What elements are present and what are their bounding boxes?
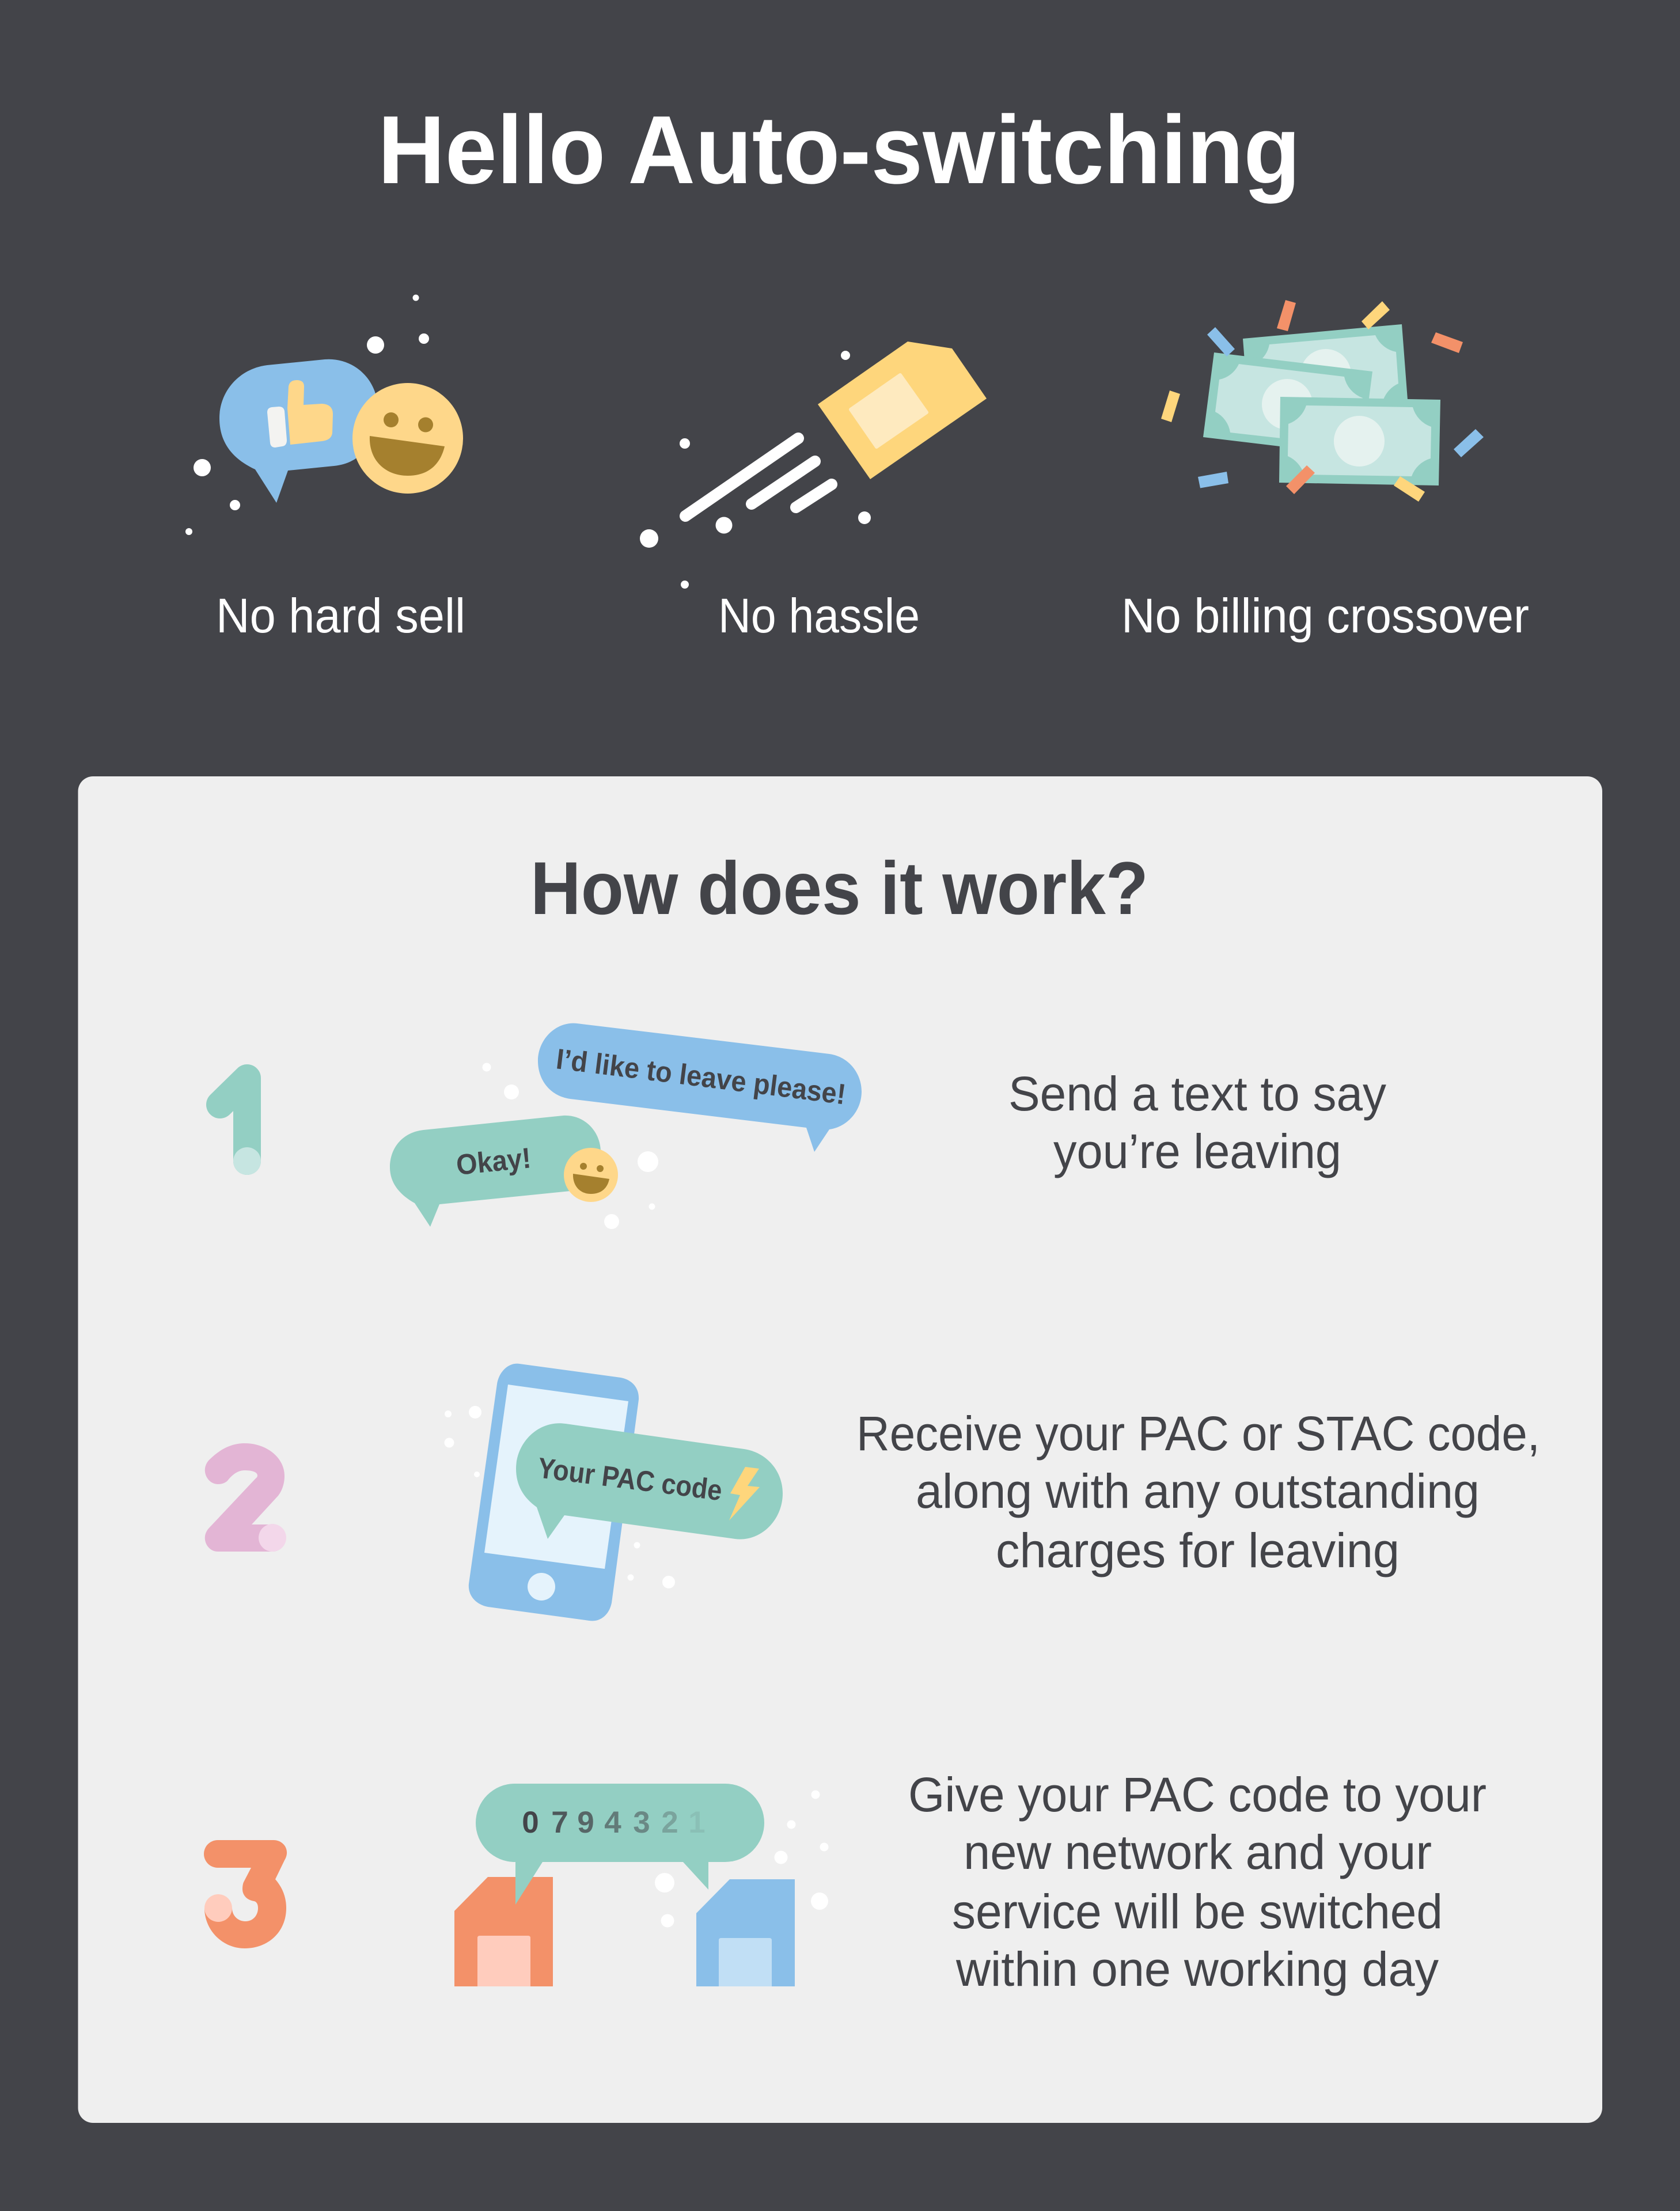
label: no billing crossover: No billing crossover bbox=[1121, 589, 1529, 643]
teal speech bubble: Okay! bbox=[455, 1141, 532, 1181]
confetti bbox=[1161, 300, 1484, 502]
step 2 number bbox=[205, 1443, 286, 1552]
step 1 illustration: text conversation bbox=[390, 1023, 862, 1229]
speech bubble bbox=[476, 1784, 764, 1905]
panel background bbox=[78, 776, 1602, 2123]
smiley bbox=[352, 383, 463, 494]
dots bbox=[483, 1063, 658, 1229]
front banknote bbox=[1279, 397, 1440, 486]
blue speech bubble bbox=[538, 1023, 862, 1152]
step 2 text: along with any outstanding bbox=[916, 1464, 1480, 1518]
thumb cuff bbox=[267, 407, 287, 447]
step 1 text bbox=[1008, 1067, 1386, 1178]
PAC code digits bbox=[522, 1806, 706, 1840]
step 3 number bbox=[204, 1840, 287, 1948]
dots bbox=[655, 1790, 828, 1927]
blue house bbox=[696, 1879, 795, 1986]
step 1 number bbox=[220, 1078, 261, 1175]
SIM card bbox=[818, 342, 987, 479]
icon: no hassle, flying SIM card bbox=[640, 342, 987, 589]
SIM chip bbox=[851, 375, 927, 447]
dots bbox=[640, 351, 871, 589]
step 1 text: Send a text to say bbox=[1008, 1067, 1386, 1121]
orange house bbox=[454, 1877, 553, 1986]
PAC code digits: 0 bbox=[522, 1806, 539, 1840]
blue speech bubble: I’d like to leave please! bbox=[555, 1042, 848, 1110]
step 2 text: charges for leaving bbox=[996, 1523, 1400, 1577]
dots bbox=[185, 295, 429, 535]
icon: no hard sell, speech bubble with thumbs up and smiley bbox=[185, 295, 463, 535]
thumb bbox=[287, 380, 333, 445]
heading: How does it work? bbox=[530, 846, 1148, 930]
PAC code digits: 2 bbox=[661, 1806, 678, 1840]
step 1 text: you’re leaving bbox=[1053, 1124, 1341, 1178]
middle banknote bbox=[1203, 352, 1372, 456]
step 3 illustration: code passed between networks bbox=[454, 1784, 828, 1986]
lightning bolt bbox=[729, 1467, 760, 1520]
back banknote bbox=[1243, 324, 1409, 428]
step 3 text: new network and your bbox=[964, 1825, 1432, 1879]
step 2 illustration: phone with PAC code bbox=[445, 1364, 783, 1621]
PAC code digits: 1 bbox=[688, 1806, 706, 1840]
speed lines bbox=[685, 438, 832, 516]
step 3 text: service will be switched bbox=[952, 1884, 1443, 1939]
dots bbox=[445, 1406, 675, 1588]
icon: no billing crossover, banknotes and confetti bbox=[1161, 300, 1484, 502]
speech bubble bbox=[219, 359, 378, 503]
speech bubble with PAC code bbox=[516, 1423, 783, 1539]
teal speech bubble bbox=[390, 1116, 601, 1227]
step 3 text: within one working day bbox=[955, 1942, 1439, 1996]
step 2 text: Receive your PAC or STAC code, bbox=[856, 1406, 1540, 1461]
PAC code digits: 4 bbox=[604, 1806, 621, 1840]
title: Hello Auto-switching bbox=[378, 96, 1300, 204]
label: no hard sell: No hard sell bbox=[216, 589, 465, 643]
phone bbox=[469, 1364, 639, 1621]
step 3 text: Give your PAC code to your bbox=[908, 1768, 1486, 1822]
smiley bbox=[564, 1148, 618, 1202]
speech bubble with PAC code: Your PAC code bbox=[536, 1451, 724, 1507]
panel: how does it work bbox=[78, 776, 1602, 2123]
PAC code digits: 7 bbox=[551, 1806, 568, 1840]
PAC code digits: 3 bbox=[633, 1806, 650, 1840]
step 3 text bbox=[908, 1768, 1486, 1996]
PAC code digits: 9 bbox=[577, 1806, 594, 1840]
step 2 text bbox=[856, 1406, 1540, 1577]
label: no hassle: No hassle bbox=[718, 589, 920, 643]
